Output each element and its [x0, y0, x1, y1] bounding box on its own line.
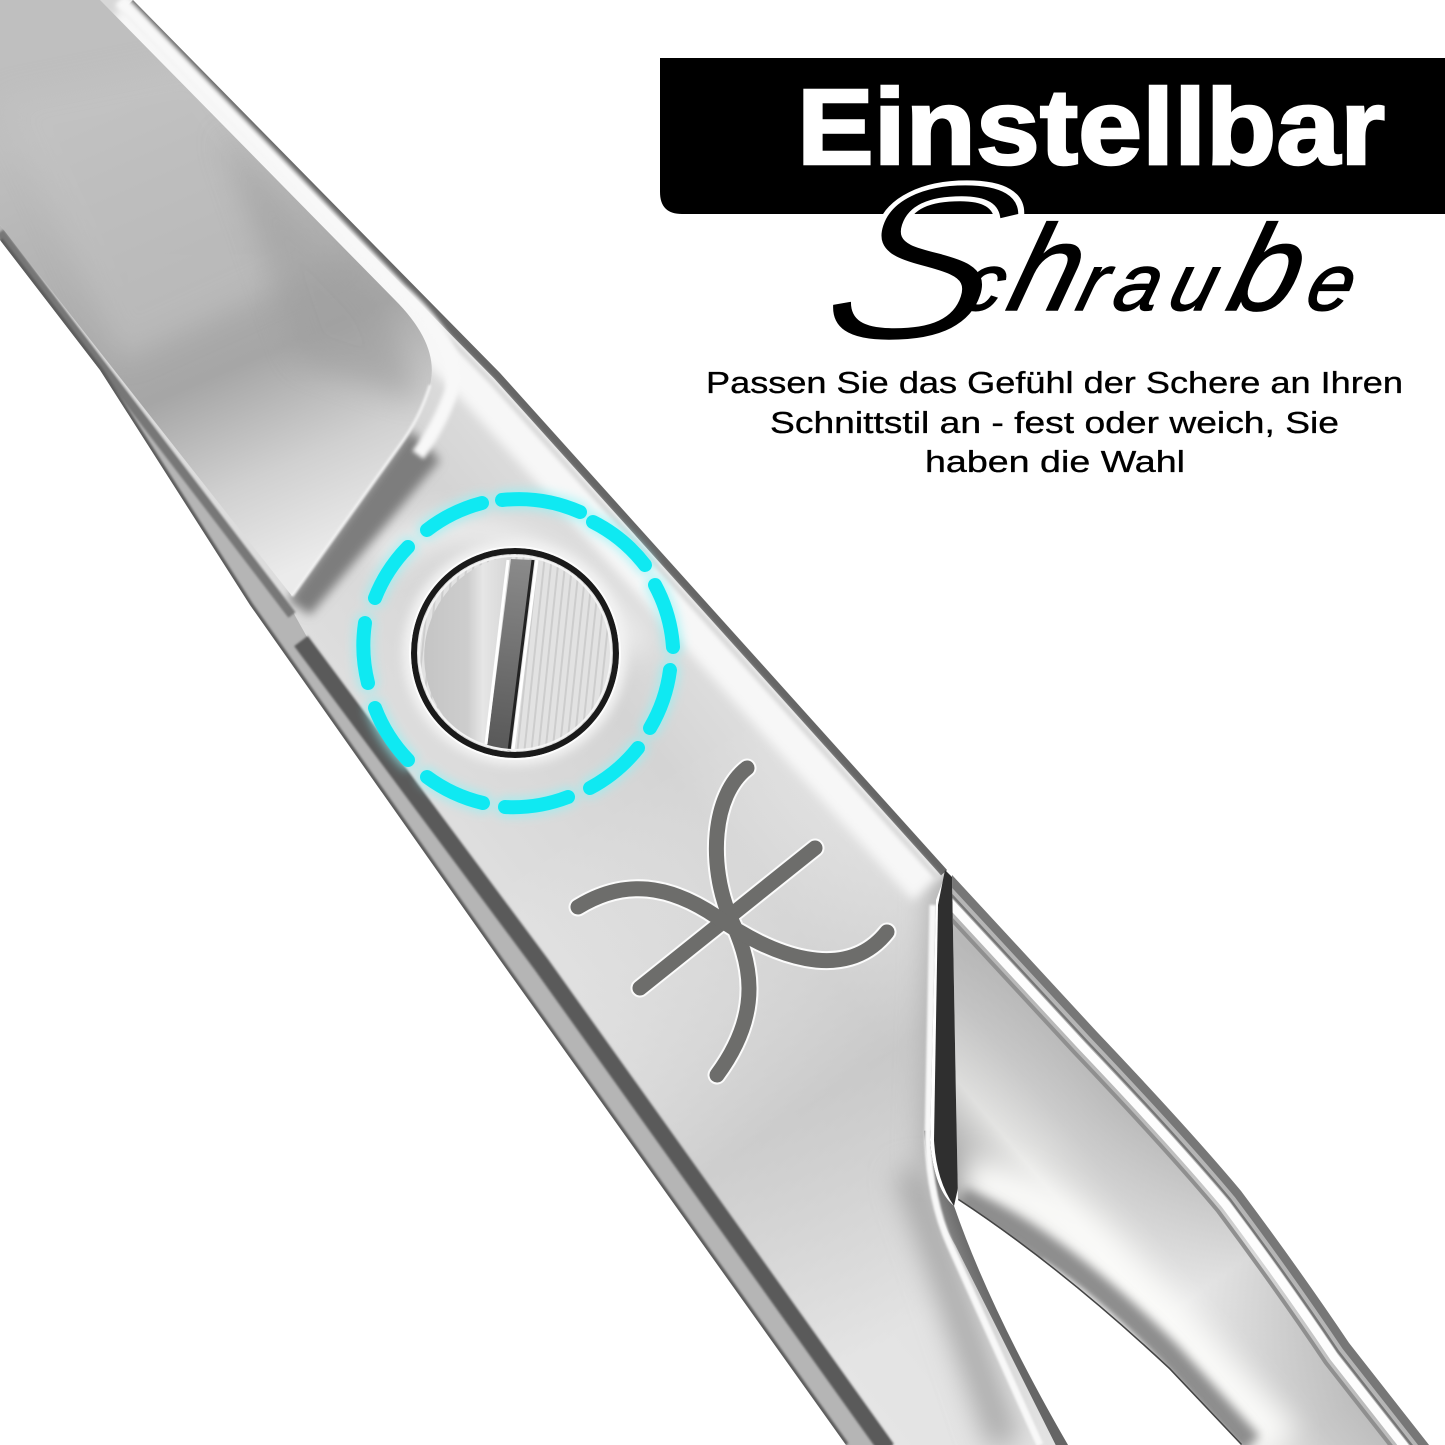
script word: r: [1069, 238, 1123, 328]
screw head: [415, 552, 615, 754]
icon: engraved logo: [578, 768, 887, 1075]
title: Einstellbar: [797, 66, 1385, 187]
screw slot: [487, 559, 533, 751]
description text: Passen Sie das Gefühl der Schere an Ihren: [706, 365, 1403, 400]
script word: e: [1298, 238, 1367, 328]
description text: haben die Wahl: [925, 444, 1185, 479]
script capital: S: [795, 137, 1050, 388]
screw ring: [414, 551, 616, 755]
description text: [706, 365, 1403, 479]
script word: c: [953, 238, 1017, 328]
scissors: main body: [0, 0, 1100, 1445]
icon: adjustment screw: [403, 541, 627, 765]
scissors: upper handle: [929, 860, 1445, 1445]
title banner: [660, 58, 1445, 214]
description text: Schnittstil an - fest oder weich, Sie: [770, 405, 1339, 440]
scissors: slot between blade and handle: [934, 870, 958, 1206]
plate and edge bands: [0, 0, 1100, 1445]
blade recess: [0, 0, 453, 615]
script word: a: [1105, 238, 1174, 328]
script word: u: [1161, 238, 1230, 328]
script word: h: [997, 201, 1101, 337]
callout: cyan dashed ring around the screw: [363, 499, 673, 807]
script word: b: [1217, 201, 1321, 337]
screw halo: [403, 541, 627, 765]
script heading: [795, 137, 1377, 388]
